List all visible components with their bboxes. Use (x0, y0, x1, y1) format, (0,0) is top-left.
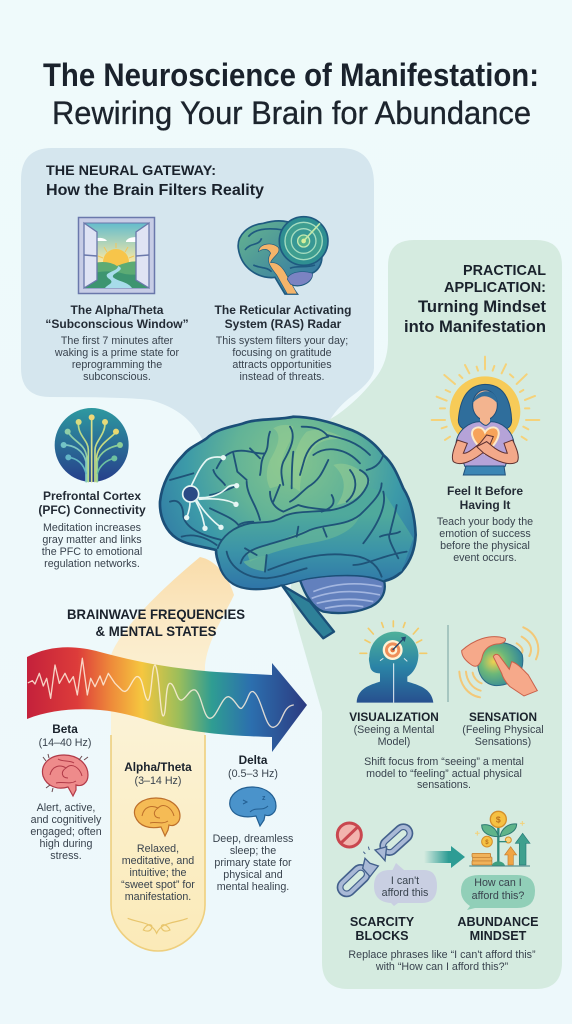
delta state: physical and (223, 869, 283, 881)
speech bubble: how can I afford this (461, 875, 535, 910)
brain stem (282, 585, 334, 638)
alpha theta state: (3–14 Hz) (135, 775, 181, 787)
text: visualization: (Seeing a Mental (354, 724, 434, 736)
heading: practical application: Turning Mindset (418, 297, 546, 316)
icon: red brain (42, 754, 88, 796)
delta state: Delta (239, 753, 268, 767)
icon: golden brain (134, 798, 180, 836)
panel: practical application (290, 240, 562, 989)
beta state: engaged; often (30, 826, 102, 838)
heading: practical application: PRACTICAL (463, 262, 546, 279)
text: replace phrases (348, 949, 536, 973)
speech bubble: I can't afford this: I can't (391, 875, 419, 887)
heading: practical application: into Manifestation (404, 317, 546, 336)
heading: brainwave frequencies (67, 607, 245, 639)
text: replace phrases: Replace phrases like “I can't afford this” (348, 949, 536, 961)
text: visualization: VISUALIZATION (349, 710, 439, 724)
alpha theta column (111, 700, 205, 951)
label: abundance mindset: MINDSET (470, 929, 527, 943)
text: RAS radar: instead of threats. (240, 371, 324, 383)
icon: hands on textured shape (459, 627, 538, 697)
alpha theta state: intuitive; the (129, 867, 187, 879)
delta state: primary state for (214, 857, 292, 869)
icon: open window with sunrise (78, 218, 154, 294)
section: prefrontal cortex connectivity (38, 408, 146, 570)
text: feel it before having it: event occurs. (453, 552, 517, 564)
text: sensation (462, 710, 544, 748)
beta state: Alert, active, (37, 802, 95, 814)
label: scarcity blocks: SCARCITY (350, 915, 415, 929)
text: feel it before having it (437, 484, 533, 564)
beta state: and cognitively (31, 814, 102, 826)
label: scarcity blocks (350, 915, 415, 943)
text: sensation: (Feeling Physical (462, 724, 544, 736)
decoration: flourish (128, 918, 188, 933)
text: feel it before having it: emotion of success (439, 528, 531, 540)
central brain illustration (160, 417, 416, 638)
title: Rewiring Your Brain for Abundance (52, 95, 531, 131)
panel: the neural gateway (21, 148, 374, 445)
divider line (447, 625, 449, 702)
alpha theta state: “sweet spot” for (121, 879, 195, 891)
text: PFC connectivity: (PFC) Connectivity (38, 503, 146, 517)
icon: head with target (357, 621, 433, 703)
text: alpha theta window: “Subconscious Window” (45, 317, 189, 331)
heading: brainwave frequencies: & MENTAL STATES (96, 624, 216, 639)
title: The Neuroscience of Manifestation: (43, 57, 539, 93)
icon: money plant and rising arrows: $ (485, 840, 489, 846)
text: RAS radar: This system filters your day; (216, 335, 348, 347)
text: RAS radar: The Reticular Activating (215, 303, 351, 317)
text: shift focus: sensations. (417, 779, 471, 791)
arrow: frequency spectrum (27, 647, 307, 752)
icon: woman with hands on heart (432, 357, 539, 475)
waveform line (28, 658, 293, 727)
text: alpha theta window (45, 303, 189, 383)
delta state: sleep; the (230, 845, 276, 857)
speech bubble: how can I afford this: afford this? (472, 890, 524, 902)
text: shift focus: model to “feeling” actual physical (366, 768, 522, 780)
beta state: (14–40 Hz) (39, 737, 91, 749)
text: alpha theta window: The first 7 minutes after (61, 335, 174, 347)
beta state: stress. (50, 850, 82, 862)
neural connections (183, 455, 239, 531)
text: PFC connectivity: the PFC to emotional (42, 546, 142, 558)
heading: brainwave frequencies: BRAINWAVE FREQUENCIES (67, 607, 245, 622)
heading: practical application (404, 262, 546, 336)
heading: neural gateway: How the Brain Filters Reality (46, 182, 264, 199)
alpha theta state: manifestation. (125, 891, 191, 903)
icon: brain with radar (238, 217, 328, 294)
section: brainwave frequencies (27, 557, 307, 951)
text: sensation: Sensations) (475, 736, 531, 748)
speech bubble: I can't afford this: afford this (382, 887, 428, 899)
delta state: Deep, dreamless (213, 833, 293, 845)
text: shift focus (364, 756, 524, 791)
heading: neural gateway: THE NEURAL GATEWAY: (46, 162, 216, 178)
cerebellum (300, 575, 385, 613)
icon: money plant and rising arrows (469, 811, 530, 866)
text: PFC connectivity: gray matter and links (42, 534, 142, 546)
text: feel it before having it: Teach your body the (437, 516, 533, 528)
icon: broken chain with prohibition sign (337, 823, 403, 887)
title (43, 57, 539, 131)
label: abundance mindset (457, 915, 539, 943)
text: visualization (349, 710, 439, 748)
alpha theta state: Relaxed, (137, 843, 179, 855)
text: feel it before having it: before the physical (440, 540, 530, 552)
alpha theta state (121, 760, 195, 933)
text: feel it before having it: Having It (460, 498, 510, 512)
heading: neural gateway (46, 162, 264, 199)
text: PFC connectivity: Meditation increases (43, 522, 141, 534)
text: alpha theta window: subconscious. (83, 371, 151, 383)
text: PFC connectivity (38, 489, 146, 570)
text: alpha theta window: reprogramming the (72, 359, 162, 371)
icon: sleeping blue brain: z (262, 795, 266, 802)
icon: neural tree in circle (55, 408, 129, 482)
speech bubble: how can I afford this: How can I (474, 877, 522, 889)
delta state: (0.5–3 Hz) (228, 768, 278, 780)
text: sensation: SENSATION (469, 710, 537, 724)
speech bubble: I can't afford this (374, 863, 437, 906)
text: RAS radar: focusing on gratitude (232, 347, 332, 359)
icon: money plant and rising arrows: $ (496, 814, 501, 824)
text: RAS radar: attracts opportunities (232, 359, 332, 371)
text: feel it before having it: Feel It Before (447, 484, 523, 498)
beta state: Beta (52, 722, 78, 736)
label: scarcity blocks: BLOCKS (355, 929, 409, 943)
text: alpha theta window: waking is a prime state for (54, 347, 180, 359)
text: alpha theta window: The Alpha/Theta (71, 303, 164, 317)
beta state (30, 722, 102, 862)
alpha theta state: meditative, and (122, 855, 194, 867)
glow beam from brain (111, 557, 234, 720)
text: PFC connectivity: Prefrontal Cortex (43, 489, 141, 503)
text: PFC connectivity: regulation networks. (44, 558, 140, 570)
text: RAS radar: System (RAS) Radar (225, 317, 342, 331)
delta state (213, 753, 293, 893)
alpha theta state: Alpha/Theta (124, 760, 192, 774)
text: shift focus: Shift focus from “seeing” a mental (364, 756, 524, 768)
delta state: mental healing. (217, 881, 289, 893)
cerebrum (160, 417, 416, 589)
beta state: high during (40, 838, 92, 850)
heading: practical application: APPLICATION: (444, 279, 546, 296)
arrow: scarcity to abundance (424, 846, 465, 868)
text: RAS radar (215, 303, 351, 383)
text: visualization: Model) (378, 736, 410, 748)
label: abundance mindset: ABUNDANCE (457, 915, 539, 929)
text: replace phrases: with “How can I afford this?” (375, 961, 509, 973)
